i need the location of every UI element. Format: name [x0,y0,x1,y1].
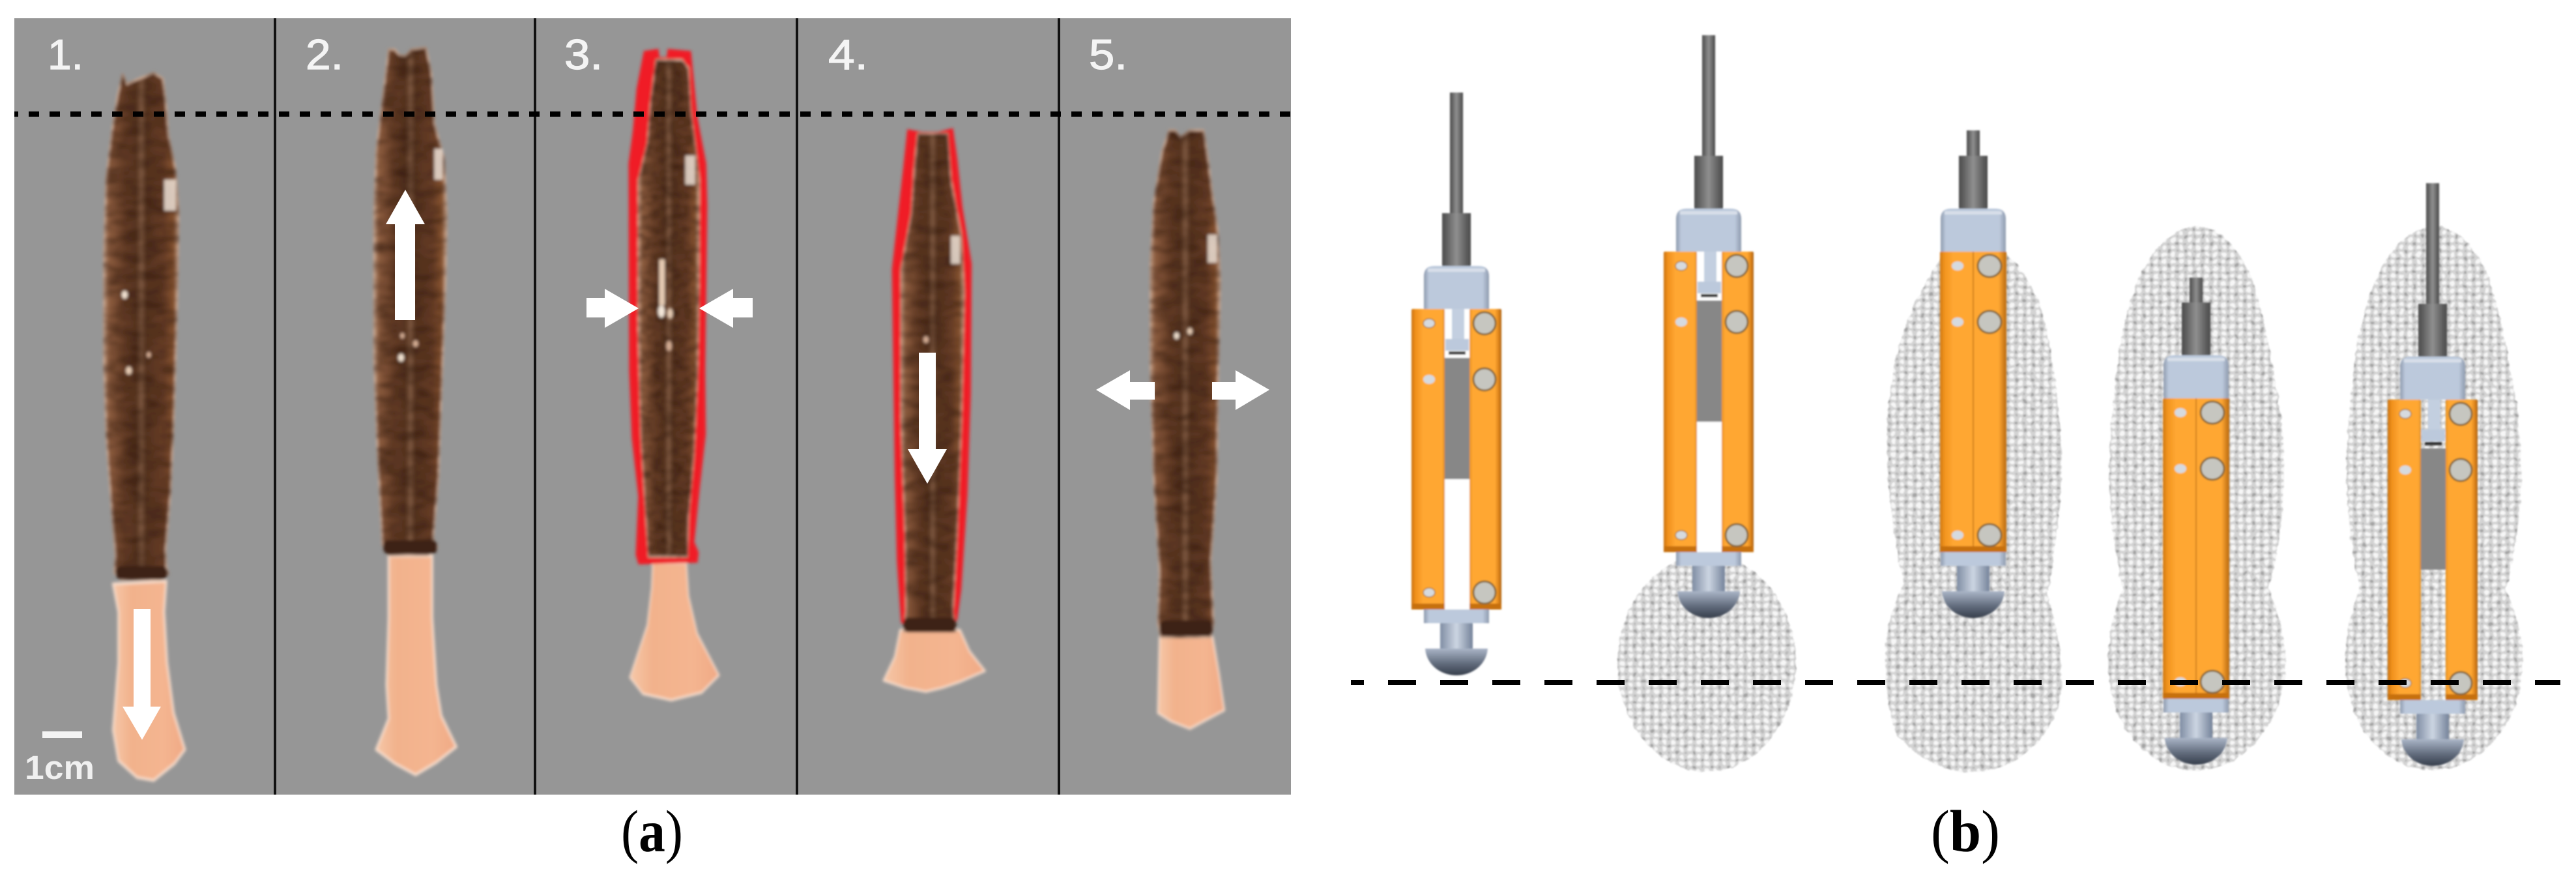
leech 3 with red outline [629,50,719,700]
actuator 5 [2388,183,2478,766]
arrow: leech 1 foot extends down [123,609,161,740]
grey photo background [14,18,1291,795]
step numbers: 4. [828,31,868,78]
actuator 2 [1664,35,1754,618]
arrow: leech 2 body extends up [386,190,425,320]
arrow: leech 4 pulls down [908,353,947,484]
step numbers: 2. [306,31,343,78]
panel b: peristaltic robot sequence [1336,35,2564,772]
leech 4 with red outline [884,128,985,692]
arrows: leech 5 expands outward [1096,370,1269,410]
arrows: leech 3 squeeze inward [586,289,753,328]
step numbers: 3. [564,31,603,78]
reference dashed line [8,111,1297,117]
leech 1 [104,73,185,780]
panel dividers [274,18,1060,795]
ground reference dashed line [1336,680,2564,685]
panel a: leech locomotion photo strip [8,18,1297,795]
step numbers: 5. [1089,31,1127,78]
soil cavities [1617,226,2523,772]
leech 2 [374,48,456,775]
scale bar: 1cm [25,749,94,786]
step numbers [48,31,1127,78]
step numbers: 1. [48,31,83,78]
caption b: (b) [1931,799,2000,864]
leech 5 [1150,130,1224,729]
scale bar [25,731,94,786]
actuator 3 [1940,130,2006,618]
actuator 4 [2163,278,2229,765]
actuator 1 [1411,93,1501,675]
caption a: (a) [621,799,683,864]
